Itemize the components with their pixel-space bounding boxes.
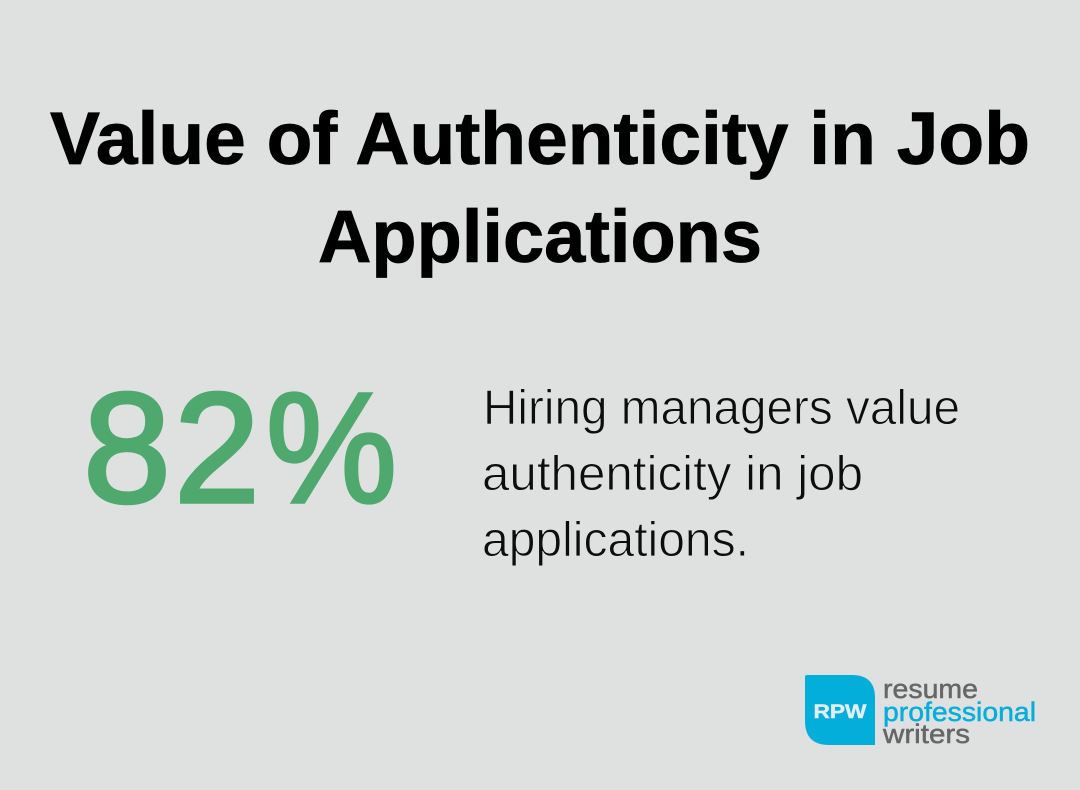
statistic: 82%: 2 xyxy=(174,361,260,536)
logo wordmark: professional xyxy=(883,697,1036,727)
statistic description: authenticity in job xyxy=(482,447,863,501)
logo wordmark: resume xyxy=(883,674,978,704)
title xyxy=(50,97,1030,278)
title: Applications xyxy=(318,195,762,278)
title: Value of Authenticity in Job xyxy=(50,97,1030,180)
statistic: 82% xyxy=(83,361,397,536)
logo wordmark: writers xyxy=(882,719,970,749)
statistic: 82%: % xyxy=(266,361,397,536)
statistic description: Hiring managers value xyxy=(483,381,960,435)
logo: Resume Professional Writers xyxy=(805,674,1036,749)
logo badge xyxy=(805,675,875,745)
logo badge: RPW xyxy=(814,702,867,723)
statistic description xyxy=(482,381,960,567)
logo wordmark xyxy=(882,674,1036,749)
statistic description: applications. xyxy=(482,513,749,567)
statistic: 82%: 8 xyxy=(83,361,171,536)
